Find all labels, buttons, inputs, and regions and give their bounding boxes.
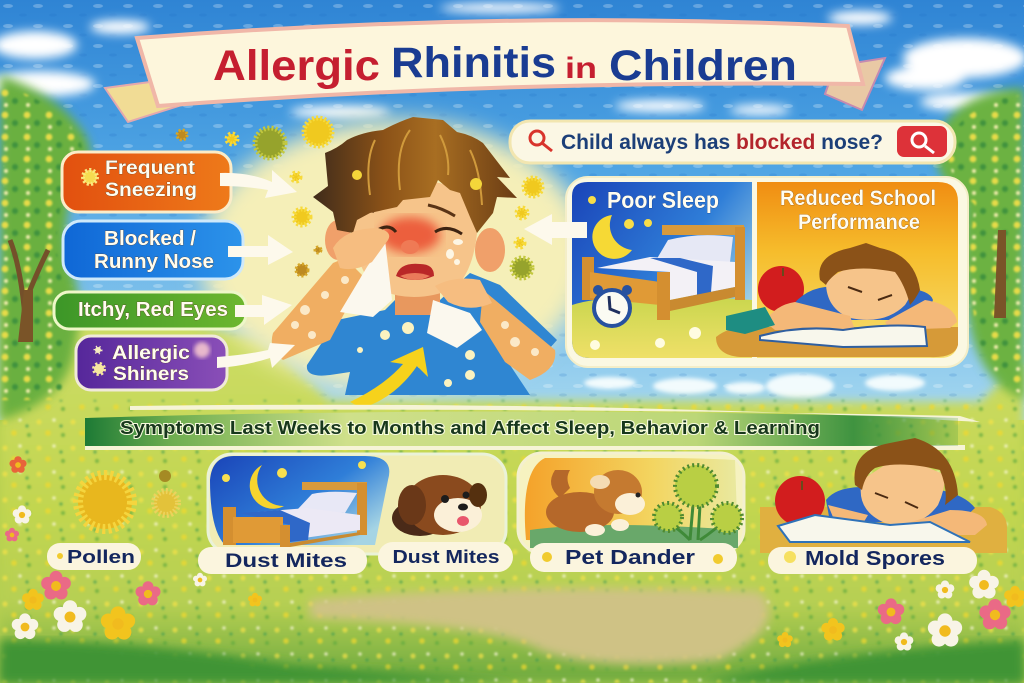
symptom: allergic shiners: Allergic — [112, 343, 190, 364]
title: in — [565, 52, 597, 85]
icon: dog — [546, 470, 645, 536]
icon: small magnifier — [530, 131, 552, 151]
title: Allergic — [213, 42, 380, 90]
arrow: sneezing — [220, 170, 297, 198]
icon: plants — [654, 465, 742, 540]
callout: symptoms duration band — [85, 405, 980, 450]
callout: symptoms duration band: Symptoms Last Weeks to Months and Affect Sleep, Behavior & Learning — [120, 418, 820, 438]
panel: reduced school performance: Performance — [798, 211, 920, 234]
eyes — [375, 227, 462, 234]
tree right — [936, 88, 1024, 400]
trigger: dust mites panel — [198, 454, 506, 574]
symptom: frequent sneezing: Sneezing — [105, 180, 197, 201]
hair — [313, 117, 517, 233]
tree left — [0, 75, 90, 420]
symptom: itchy red eyes: Itchy, Red Eyes — [78, 299, 228, 321]
arrow: eyes — [235, 295, 292, 325]
symptom: blocked / runny nose — [63, 221, 243, 279]
open book — [760, 326, 927, 347]
symptom: frequent sneezing — [62, 152, 231, 212]
neck — [395, 285, 440, 315]
book — [778, 515, 970, 542]
mouth — [396, 264, 434, 280]
panel: poor sleep: Poor Sleep — [607, 187, 719, 213]
trigger: mold spores panel — [760, 438, 1007, 574]
ribbons — [105, 82, 185, 122]
pollen grains around child — [177, 118, 542, 278]
title: Rhinitis — [391, 39, 556, 87]
left ear — [325, 220, 351, 260]
arrow: shiners — [217, 343, 295, 368]
label: dust mites: Dust Mites — [225, 551, 347, 572]
icon: moon — [592, 215, 632, 259]
icon: yellow arrow — [350, 347, 428, 408]
shirt — [307, 273, 557, 395]
face — [352, 180, 478, 297]
tissue left — [340, 240, 392, 317]
icon: search button — [897, 126, 947, 157]
left arm — [272, 258, 362, 360]
nose redness — [380, 217, 440, 253]
right arm — [480, 290, 555, 380]
label: dust mites — [198, 547, 367, 574]
label: dust mites second: Dust Mites — [392, 547, 500, 567]
icon: apple — [775, 476, 825, 526]
trigger: pet dander panel: Pet Dander — [565, 547, 695, 569]
title banner — [105, 20, 885, 122]
symptom: blocked / runny nose: Blocked / — [104, 228, 196, 250]
search text: Child always has blocked nose? — [561, 131, 883, 154]
symptom: frequent sneezing: Frequent — [105, 158, 196, 179]
icon: pollen — [78, 470, 178, 529]
arrow: nose — [228, 235, 293, 265]
tears — [446, 239, 463, 265]
symptom: itchy red eyes — [54, 292, 246, 329]
trigger: mold spores panel: Mold Spores — [805, 548, 945, 570]
arrow: panels to child — [524, 214, 587, 245]
icon: apple — [758, 266, 804, 312]
sleeping boy — [765, 243, 957, 330]
bed — [223, 482, 367, 547]
title: Children — [609, 42, 797, 90]
panel: poor sleep — [572, 182, 752, 358]
label: dust mites second — [378, 542, 513, 572]
flowers foreground — [0, 456, 1024, 683]
icon: moon — [250, 465, 284, 509]
desk — [716, 327, 958, 357]
search bar — [510, 121, 955, 163]
panel: reduced school performance — [716, 182, 958, 358]
icon: puppy — [392, 475, 487, 536]
tissue right — [427, 300, 482, 348]
child — [272, 117, 557, 408]
right hand — [435, 278, 492, 308]
rash spots — [291, 276, 539, 356]
trigger: pet dander panel — [518, 453, 744, 572]
right ear — [475, 228, 505, 272]
green book — [726, 307, 775, 334]
symptom: allergic shiners: Shiners — [113, 364, 189, 385]
panels frame — [566, 177, 968, 367]
left hand — [333, 228, 389, 269]
pollen haze around child — [200, 120, 590, 390]
bed — [582, 225, 745, 320]
title — [213, 39, 797, 90]
symptom: blocked / runny nose: Runny Nose — [94, 251, 214, 273]
trigger: pollen — [47, 470, 178, 570]
symptom: allergic shiners — [76, 336, 227, 390]
panel: reduced school performance: Reduced School — [780, 187, 936, 210]
sleeping boy — [826, 438, 987, 535]
icon: alarm clock — [593, 285, 632, 326]
trigger: pollen: Pollen — [67, 547, 135, 567]
path through meadow — [310, 588, 769, 664]
